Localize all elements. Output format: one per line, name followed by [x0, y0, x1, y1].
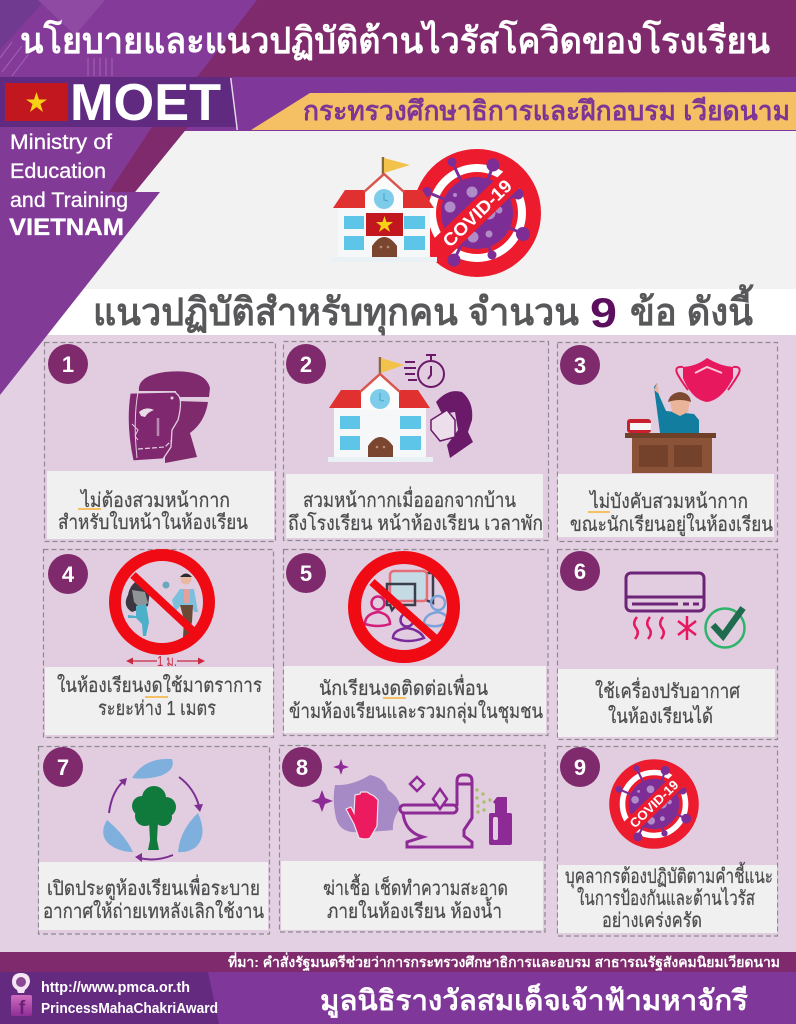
- icon: student at desk: [625, 383, 716, 473]
- arrow: 1 metre distance: [126, 653, 205, 670]
- number badge 5: 5: [300, 561, 312, 586]
- icon: web globe: [12, 973, 30, 993]
- icon: toilet: [400, 775, 472, 847]
- icon: covid prohibition: COVID-19: [439, 176, 516, 251]
- arrows: cycle: [109, 777, 203, 862]
- icon: covid prohibition: [413, 149, 541, 277]
- icon: Vietnam flag: [5, 83, 68, 121]
- number badge 7: 7: [57, 755, 69, 780]
- number badge 9: 9: [574, 755, 586, 780]
- text box 5: นักเรียนงดติดต่อเพื่อน: [319, 674, 488, 700]
- foundation name: มูลนิธิรางวัลสมเด็จเจ้าฟ้ามหาจักรี: [320, 983, 748, 1018]
- panel: item 9: [558, 746, 778, 936]
- icon: prohibition sign: [115, 555, 209, 649]
- icon: prohibition sign: [354, 558, 454, 656]
- text box 2: [286, 474, 543, 538]
- icon: green check: [706, 608, 744, 648]
- title: นโยบายและแนวปฏิบัติต้านไวรัสโควิดของโรงเรียน: [20, 19, 770, 61]
- number badge 3: [560, 345, 600, 385]
- icon: pink mask: [676, 358, 740, 402]
- text box 5: ข้ามห้องเรียนและรวมกลุ่มในชุมชน: [289, 700, 543, 724]
- header band: [0, 0, 796, 77]
- ministry name: VIETNAM: [9, 214, 124, 241]
- heading strip background: [0, 289, 796, 335]
- number badge 9: [560, 747, 600, 787]
- text box 5: [284, 666, 546, 733]
- number badge 1: 1: [62, 352, 74, 377]
- panel: item 6: [558, 550, 778, 740]
- heading: แนวปฏิบัติสำหรับทุกคน จำนวน: [93, 292, 579, 336]
- icon: covid prohibition: [609, 759, 699, 849]
- text box 1: [47, 471, 274, 539]
- icon: masked face: [431, 391, 473, 458]
- text box 8: ภายในห้องเรียน ห้องน้ำ: [327, 897, 502, 923]
- heading: ข้อ ดังนี้: [630, 284, 754, 334]
- number badge 1: [48, 344, 88, 384]
- MOET logo text: MOET: [70, 74, 221, 132]
- number badge 4: [48, 554, 88, 594]
- number badge 8: 8: [296, 755, 308, 780]
- number badge 6: 6: [574, 559, 586, 584]
- number badge 3: 3: [574, 353, 586, 378]
- icon: air conditioner: [626, 573, 704, 611]
- panel: item 5: [284, 550, 548, 736]
- text box 1: สำหรับใบหน้าในห้องเรียน: [58, 511, 248, 534]
- text box 6: ในห้องเรียนได้: [608, 705, 713, 728]
- number badge 5: [286, 553, 326, 593]
- footer band: [0, 972, 796, 1024]
- facebook name: PrincessMahaChakriAward: [41, 1000, 218, 1017]
- number badge 2: 2: [300, 352, 312, 377]
- source strip: [0, 952, 796, 973]
- heading: 9: [590, 289, 617, 336]
- ministry name: [9, 131, 128, 241]
- icon: school and flag: [328, 357, 433, 462]
- icon: spray bottle: [475, 788, 512, 845]
- number badge 2: [286, 344, 326, 384]
- text box 1: ไม่ต้องสวมหน้ากาก: [79, 489, 230, 512]
- left purple wedge: [0, 127, 188, 395]
- panel: item 2: [284, 342, 548, 540]
- number badge 7: [43, 747, 83, 787]
- text box 4: [45, 667, 273, 735]
- panel: item 4: [44, 550, 274, 738]
- icon: group chat: [365, 571, 448, 641]
- icon: facebook: f: [19, 998, 26, 1019]
- icon: facebook: [11, 995, 32, 1019]
- source strip: ที่มา: คำสั่งรัฐมนตรีช่วยว่าการกระทรวงศึกษาธิการและอบรม สาธารณรัฐสังคมนิยมเวียดนาม: [228, 952, 780, 972]
- text box 3: [558, 474, 774, 537]
- icon: tree: [132, 786, 176, 850]
- icon: face shield: [128, 371, 210, 463]
- icon: leaves: [103, 759, 203, 852]
- icon: stopwatch: [404, 355, 444, 387]
- panel: item 1: [44, 342, 276, 542]
- text box 4: ในห้องเรียนงดใช้มาตราการ: [57, 674, 262, 697]
- yellow ministry banner: กระทรวงศึกษาธิการและฝึกอบรม เวียดนาม: [303, 96, 790, 126]
- number badge 4: 4: [62, 562, 75, 587]
- text box 2: ถึงโรงเรียน หน้าห้องเรียน เวลาพัก: [288, 512, 543, 535]
- panel: item 3: [558, 342, 778, 542]
- text box 7: [39, 862, 268, 930]
- icon: wiping hand: [311, 759, 400, 839]
- text box 6: [558, 669, 775, 737]
- number badge 8: [282, 747, 322, 787]
- arrow: 1 metre distance: 1 ม.: [157, 653, 177, 670]
- text box 6: ใช้เครื่องปรับอากาศ: [595, 677, 740, 703]
- text box 7: อากาศให้ถ่ายเทหลังเลิกใช้งาน: [43, 900, 264, 923]
- text box 9: อย่างเคร่งครัด: [602, 910, 702, 932]
- website url: http://www.pmca.or.th: [41, 979, 190, 996]
- hero background: [0, 131, 796, 289]
- ministry name: Education: [10, 160, 106, 183]
- icon: school with flag: [332, 157, 437, 262]
- panel: item 8: [280, 746, 545, 932]
- panel: item 7: [38, 746, 270, 934]
- icon: cold air waves: [634, 616, 696, 640]
- number badge 6: [560, 551, 600, 591]
- text box 2: สวมหน้ากากเมื่อออกจากบ้าน: [303, 486, 516, 512]
- ministry band: [0, 77, 796, 131]
- ministry name: and Training: [10, 189, 128, 212]
- text box 7: เปิดประตูห้องเรียนเพื่อระบาย: [47, 874, 260, 901]
- ministry name: Ministry of: [10, 131, 112, 154]
- text box 3: ไม่บังคับสวมหน้ากาก: [588, 490, 748, 513]
- heading: [93, 284, 754, 336]
- icon: covid prohibition: COVID-19: [626, 777, 682, 831]
- text box 8: ฆ่าเชื้อ เช็ดทำความสะอาด: [323, 874, 508, 900]
- icon: two people: [126, 574, 198, 637]
- text box 9: [558, 862, 777, 933]
- text box 4: ระยะห่าง 1 เมตร: [98, 698, 216, 720]
- text box 8: [281, 861, 543, 930]
